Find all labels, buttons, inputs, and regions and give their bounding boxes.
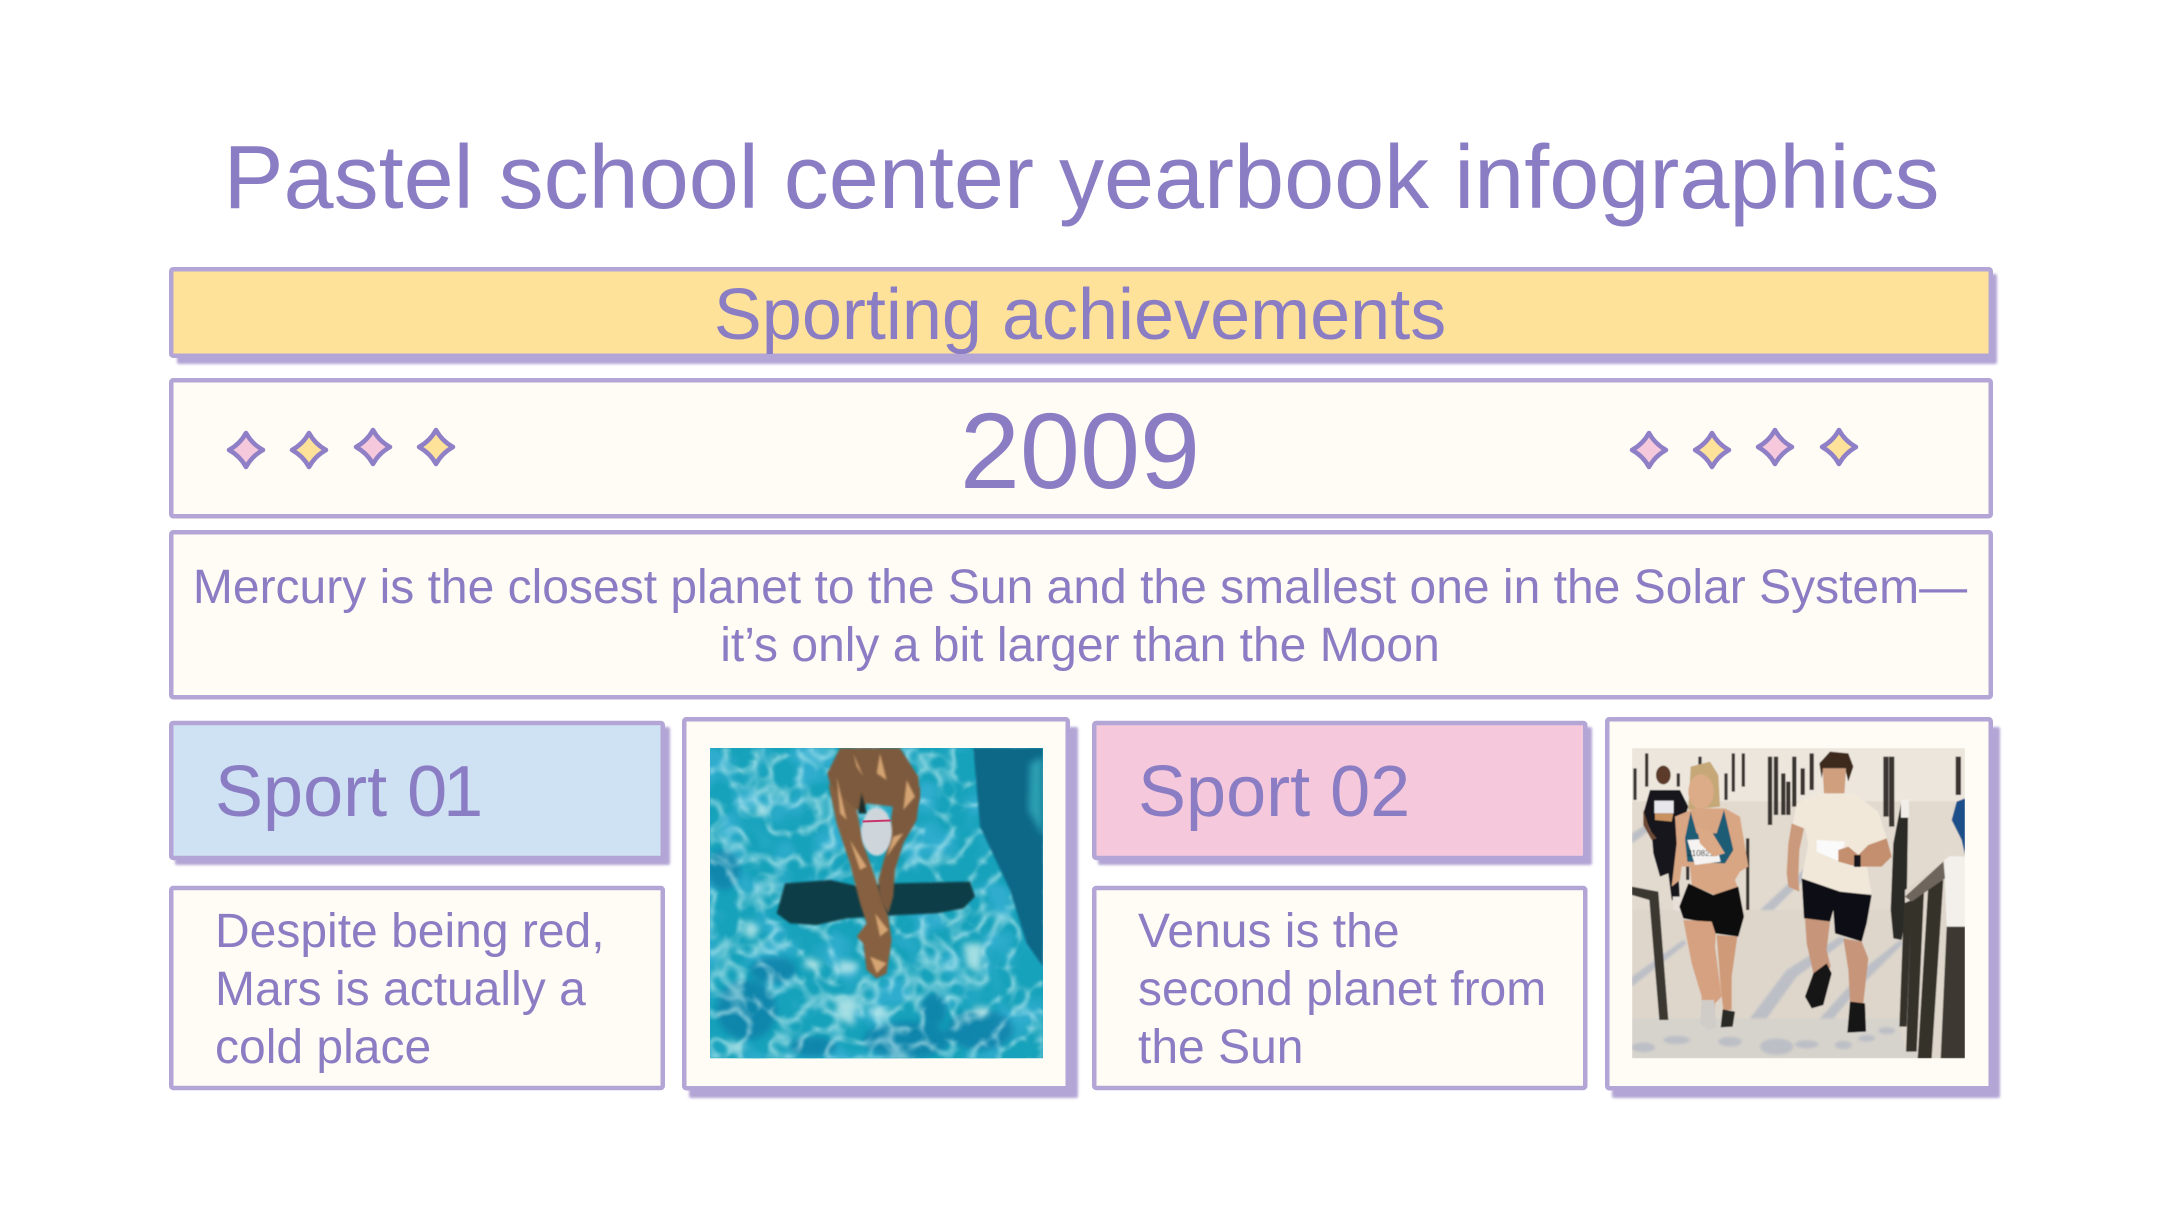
panel: description bbox=[171, 532, 1991, 697]
panel: swimmer photo frame bbox=[684, 719, 1078, 1098]
sport 02 description: the Sun bbox=[1138, 1021, 1303, 1074]
panel: runners photo frame bbox=[1607, 719, 2000, 1098]
panel: sport 02 text bbox=[1094, 888, 1585, 1088]
sport 01 label: Sport 01 bbox=[215, 752, 483, 832]
sport 02 description: second planet from bbox=[1138, 963, 1546, 1016]
photo: swimmer in pool bbox=[707, 748, 1043, 1058]
panel: sport 01 heading bbox=[171, 723, 670, 865]
banner heading: Sporting achievements bbox=[714, 275, 1446, 355]
front woman runner bbox=[1672, 762, 1748, 1031]
description text: Mercury is the closest planet to the Sun and the smallest one in the Solar System— bbox=[193, 561, 1967, 614]
sport 01 description: Despite being red, bbox=[215, 905, 605, 958]
title: Pastel school center yearbook infographics bbox=[224, 128, 1939, 228]
panel: sporting achievements banner bbox=[171, 269, 1997, 364]
male runner bbox=[1787, 752, 1892, 1033]
description text: it’s only a bit larger than the Moon bbox=[720, 619, 1440, 672]
year number: 2009 bbox=[960, 390, 1200, 511]
panel: year bbox=[171, 380, 1991, 516]
icon: left sparkles bbox=[229, 430, 453, 467]
front woman runner: 2108215 bbox=[1687, 849, 1719, 858]
sport 01 description: cold place bbox=[215, 1021, 431, 1074]
background runner bbox=[1643, 766, 1688, 912]
panel: sport 01 text bbox=[171, 888, 663, 1088]
icon: right sparkles bbox=[1632, 430, 1856, 467]
sport 02 label: Sport 02 bbox=[1138, 752, 1410, 832]
photo: runners on stairs bbox=[1632, 748, 1965, 1058]
sport 02 description: Venus is the bbox=[1138, 905, 1400, 958]
sport 01 description: Mars is actually a bbox=[215, 963, 586, 1016]
panel: sport 02 heading bbox=[1094, 723, 1592, 865]
